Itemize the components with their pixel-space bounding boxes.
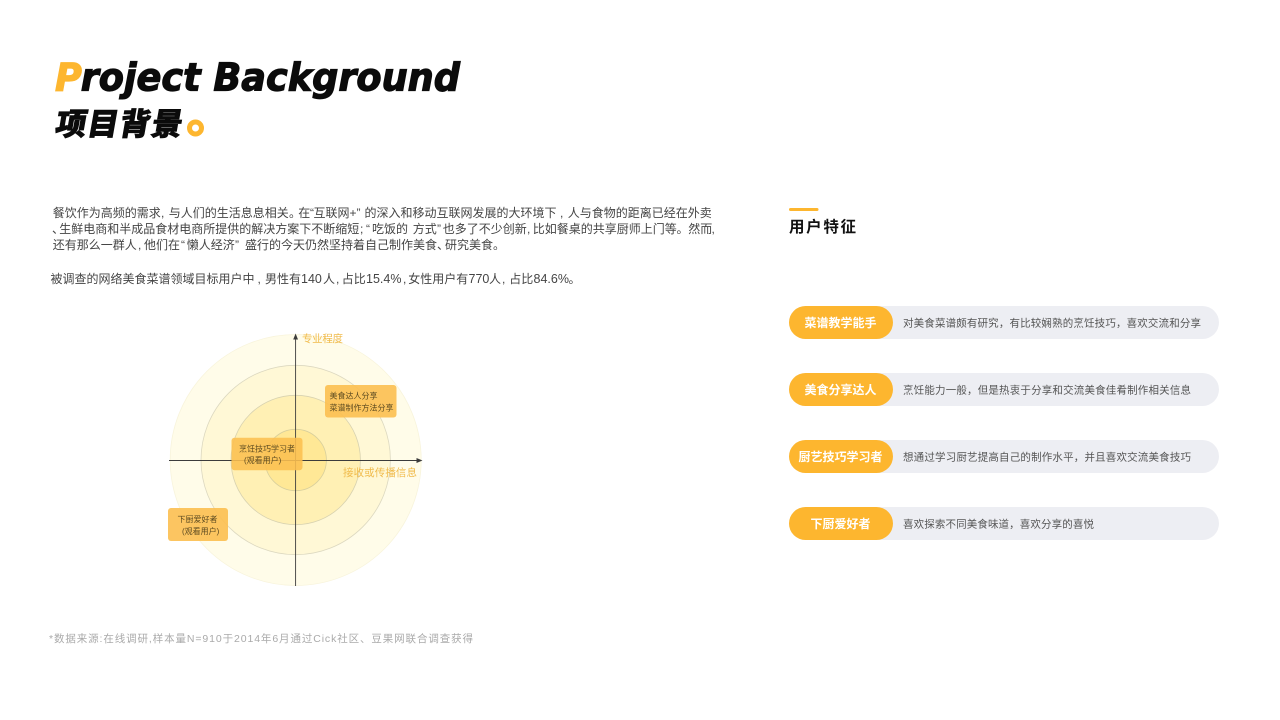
row: recipe teaching expert bbox=[789, 306, 1219, 339]
intro text block: 140 bbox=[301, 272, 322, 286]
intro text block: “ bbox=[366, 222, 370, 236]
intro text block: , bbox=[258, 272, 261, 286]
intro text block: 也多了不少创新 bbox=[443, 221, 527, 236]
intro text block: , bbox=[502, 272, 505, 286]
tag: cooking enthusiast: (观看用户) bbox=[182, 526, 220, 536]
axis label: expertise: 专业程度 bbox=[302, 332, 344, 345]
intro text block: , bbox=[560, 206, 563, 220]
intro text block: ” bbox=[437, 222, 441, 236]
tag: cooking enthusiast: 下厨爱好者 bbox=[178, 514, 218, 524]
intro text block: 、 bbox=[437, 238, 449, 252]
row: culinary skill learner: 想通过学习厨艺提高自己的制作水平，并且喜欢交流美食技巧 bbox=[903, 450, 1192, 464]
intro text block: 被调查的网络美食菜谱领域目标用户中 bbox=[50, 271, 255, 286]
intro text block: , bbox=[336, 272, 339, 286]
intro text block: , bbox=[527, 222, 530, 236]
tag: cooking skill learner: 烹饪技巧学习者 bbox=[239, 444, 295, 454]
heading: user characteristics: 用户特征 bbox=[789, 217, 856, 236]
intro text block: 占比 bbox=[342, 271, 366, 286]
row: food sharing expert: 美食分享达人 bbox=[804, 382, 877, 397]
intro text block: 女性用户有 bbox=[408, 271, 468, 286]
intro text block: 人 bbox=[489, 272, 501, 286]
intro text block: 吃饭的 bbox=[372, 221, 408, 236]
intro text block: 。 bbox=[493, 238, 505, 252]
intro text block: 比如餐桌的共享厨师上门等 bbox=[533, 221, 677, 236]
intro text block: 生鲜电商和半成品食材电商所提供的解决方案下不断缩短 bbox=[59, 221, 359, 236]
vertical axis arrow bbox=[293, 334, 298, 586]
intro text block: ; bbox=[360, 222, 363, 236]
row: cooking enthusiast: 下厨爱好者 bbox=[810, 516, 871, 531]
intro text block: 15.4% bbox=[366, 272, 401, 286]
intro text block: 84.6% bbox=[534, 272, 569, 286]
intro text block: “ bbox=[310, 206, 314, 220]
intro text block: 770 bbox=[468, 272, 489, 286]
intro text block: 方式 bbox=[413, 221, 437, 236]
intro text block: 懒人经济 bbox=[187, 237, 235, 252]
tag: food expert sharing: 美食达人分享 bbox=[330, 390, 378, 400]
icon: title ring dot bbox=[190, 122, 202, 134]
concentric quadrant chart bbox=[168, 332, 422, 586]
intro text block bbox=[50, 205, 715, 286]
intro text block: 男性有 bbox=[265, 272, 301, 286]
tag: food expert sharing bbox=[325, 385, 396, 418]
row: culinary skill learner: 厨艺技巧学习者 bbox=[798, 449, 883, 464]
intro text block: 人与食物的距离已经在外卖 bbox=[568, 205, 712, 220]
intro text block: 然而 bbox=[688, 221, 712, 236]
intro text block: 。 bbox=[289, 206, 301, 220]
intro text block: 研究美食 bbox=[445, 237, 493, 252]
intro text block: , bbox=[712, 222, 715, 236]
chart rings bbox=[170, 334, 421, 586]
row: food sharing expert: 烹饪能力一般，但是热衷于分享和交流美食佳肴制作相关信息 bbox=[903, 384, 1191, 396]
intro text block: , bbox=[138, 238, 141, 252]
intro text block: 占比 bbox=[509, 271, 533, 286]
intro text block: 盛行的今天仍然坚持着自己制作美食 bbox=[245, 237, 437, 252]
title block bbox=[53, 56, 461, 142]
intro text block: 餐饮作为高频的需求 bbox=[53, 205, 161, 220]
row: recipe teaching expert: 对美食菜谱颇有研究，有比较娴熟的烹饪技巧，喜欢交流和分享 bbox=[903, 316, 1201, 330]
intro text block: +” bbox=[350, 206, 361, 220]
horizontal axis arrow bbox=[169, 458, 422, 463]
intro text block: 还有那么一群人 bbox=[53, 238, 137, 252]
intro text block: 。 bbox=[568, 272, 581, 286]
title: chinese: 项目背景 bbox=[53, 107, 186, 142]
source footnote: *数据来源:在线调研,样本量N=910于2014年6月通过Cick社区、豆果网联合调查获得 bbox=[49, 632, 473, 645]
intro text block: 他们在 bbox=[144, 237, 180, 252]
row: food sharing expert bbox=[789, 373, 1219, 406]
intro text block: 。 bbox=[676, 222, 689, 236]
heading: user characteristics bbox=[789, 208, 856, 236]
row: recipe teaching expert: 菜谱教学能手 bbox=[804, 315, 877, 330]
intro text block: 与人们的生活息息相关 bbox=[169, 205, 289, 220]
row: cooking enthusiast bbox=[789, 507, 1219, 540]
tag: cooking enthusiast bbox=[168, 508, 228, 541]
tag: food expert sharing: 菜谱制作方法分享 bbox=[330, 402, 394, 412]
row: cooking enthusiast: 喜欢探索不同美食味道，喜欢分享的喜悦 bbox=[903, 518, 1094, 530]
intro text block: 的深入和移动互联网发展的大环境下 bbox=[364, 205, 557, 220]
intro text block: 互联网 bbox=[314, 206, 350, 220]
intro text block: 、 bbox=[52, 222, 64, 236]
intro text block: , bbox=[161, 206, 164, 220]
intro text block: 在 bbox=[298, 206, 310, 220]
row: culinary skill learner bbox=[789, 440, 1219, 473]
intro text block: ” bbox=[235, 238, 239, 252]
axis label: receive or spread info: 接收或传播信息 bbox=[343, 466, 417, 479]
intro text block: “ bbox=[181, 238, 185, 252]
tag: cooking skill learner: (观看用户) bbox=[244, 455, 282, 465]
intro text block: 人 bbox=[323, 272, 335, 286]
intro text block: , bbox=[403, 272, 406, 286]
title: english: Project Background bbox=[55, 56, 461, 100]
tag: cooking skill learner bbox=[232, 438, 302, 470]
